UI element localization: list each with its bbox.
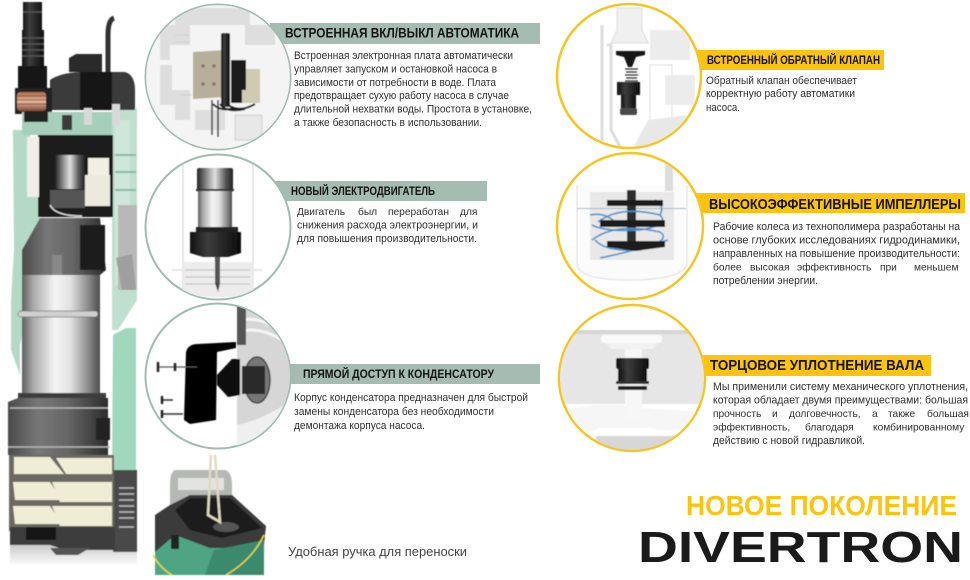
text: motor description: для повышения производительности. (297, 233, 477, 245)
circle: shaft seal (558, 305, 706, 452)
text: shaft seal description: действию с новой гидравликой. (713, 435, 865, 447)
pump cutaway illustration (8, 2, 137, 566)
text: impellers description: эффективность (797, 262, 871, 274)
text: capacitor description (294, 392, 528, 432)
text: automation description: предотвращает сухую работу насоса в случае (294, 90, 509, 102)
text: automation description: длительной нехватки воды. Простота в установке, (294, 104, 532, 116)
text: shaft seal description: прочность (713, 409, 761, 420)
text: impellers description: меньшем (914, 262, 958, 274)
text: impellers description: высокая (750, 262, 789, 274)
banner: shaft seal: ТОРЦОВОЕ УПЛОТНЕНИЕ ВАЛА (710, 357, 924, 374)
text: capacitor description: Корпус конденсатора предназначен для быстрой (294, 392, 528, 404)
text: motor description: снижения расхода электроэнергии, и (297, 220, 478, 232)
circle: motor (146, 154, 290, 300)
text: check valve description: насоса. (706, 102, 740, 114)
text: shaft seal description: благодаря (805, 422, 854, 434)
text: automation description: а также безопасность в использовании. (294, 117, 482, 129)
text: motor description: Двигатель (297, 207, 345, 218)
banner: capacitor access: ПРЯМОЙ ДОСТУП К КОНДЕНСАТОРУ (303, 366, 494, 381)
text: impellers description: основе глубоких исследованиях гидродинамики, (713, 234, 960, 246)
handle illustration (153, 455, 266, 575)
text: shaft seal description: эффективность, (713, 422, 790, 434)
text: capacitor description: демонтажа корпуса насоса. (294, 420, 425, 432)
text: shaft seal description: и (772, 409, 778, 420)
text: impellers description (713, 221, 961, 287)
text: shaft seal description: также (888, 409, 915, 420)
banner: built-in automation (270, 23, 540, 44)
text: impellers description: при (880, 262, 897, 274)
circle: impellers (557, 153, 703, 299)
text: impellers description: Рабочие колеса из технополимера разработаны на (713, 221, 961, 233)
text: automation description: зависимости от потребности в воде. Плата (294, 77, 497, 89)
text: check valve description: Обратный клапан обеспечивает (706, 75, 857, 87)
banner: check valve: ВСТРОЕННЫЙ ОБРАТНЫЙ КЛАПАН (707, 52, 880, 67)
text: impellers description: более (713, 262, 742, 274)
text: capacitor description: замены конденсатора без необходимости (294, 406, 494, 418)
text: automation description: Встроенная электронная плата автоматически (294, 50, 513, 62)
banner: built-in automation: ВСТРОЕННАЯ ВКЛ/ВЫКЛ АВТОМАТИКА (285, 24, 519, 40)
text: motor description: переработан (388, 206, 449, 218)
text: shaft seal description (713, 381, 969, 447)
banner: new motor (270, 181, 487, 201)
circle: automation board (146, 4, 290, 150)
handle caption: Удобная ручка для переноски (288, 544, 467, 559)
text: shaft seal description: а (872, 409, 878, 420)
text: impellers description: потреблении энергии. (713, 275, 818, 287)
text: shaft seal description: комбинированному (873, 422, 965, 434)
circle: check valve (557, 4, 701, 150)
text: motor description: для (460, 207, 477, 218)
text: check valve description: корректную работу автоматики (706, 88, 855, 100)
banner: capacitor access (270, 364, 540, 384)
circle: capacitor housing (146, 304, 292, 448)
text: shaft seal description: большая (927, 408, 969, 420)
heading: new generation: НОВОЕ ПОКОЛЕНИЕ (686, 490, 957, 521)
text: automation description (294, 50, 532, 129)
text: automation description: управляет запуском и остановкой насоса в (294, 64, 497, 76)
text: motor description: был (358, 206, 377, 218)
text: check valve description (706, 75, 857, 114)
banner: new motor: НОВЫЙ ЭЛЕКТРОДВИГАТЕЛЬ (291, 185, 435, 198)
logo: Divertron: DIVERTRON (638, 523, 963, 572)
text: shaft seal description: долговечность, (789, 409, 861, 420)
text: impellers description: направленных на повышение производительности: (713, 248, 960, 260)
text: motor description (297, 206, 478, 245)
banner: check valve (690, 50, 884, 70)
